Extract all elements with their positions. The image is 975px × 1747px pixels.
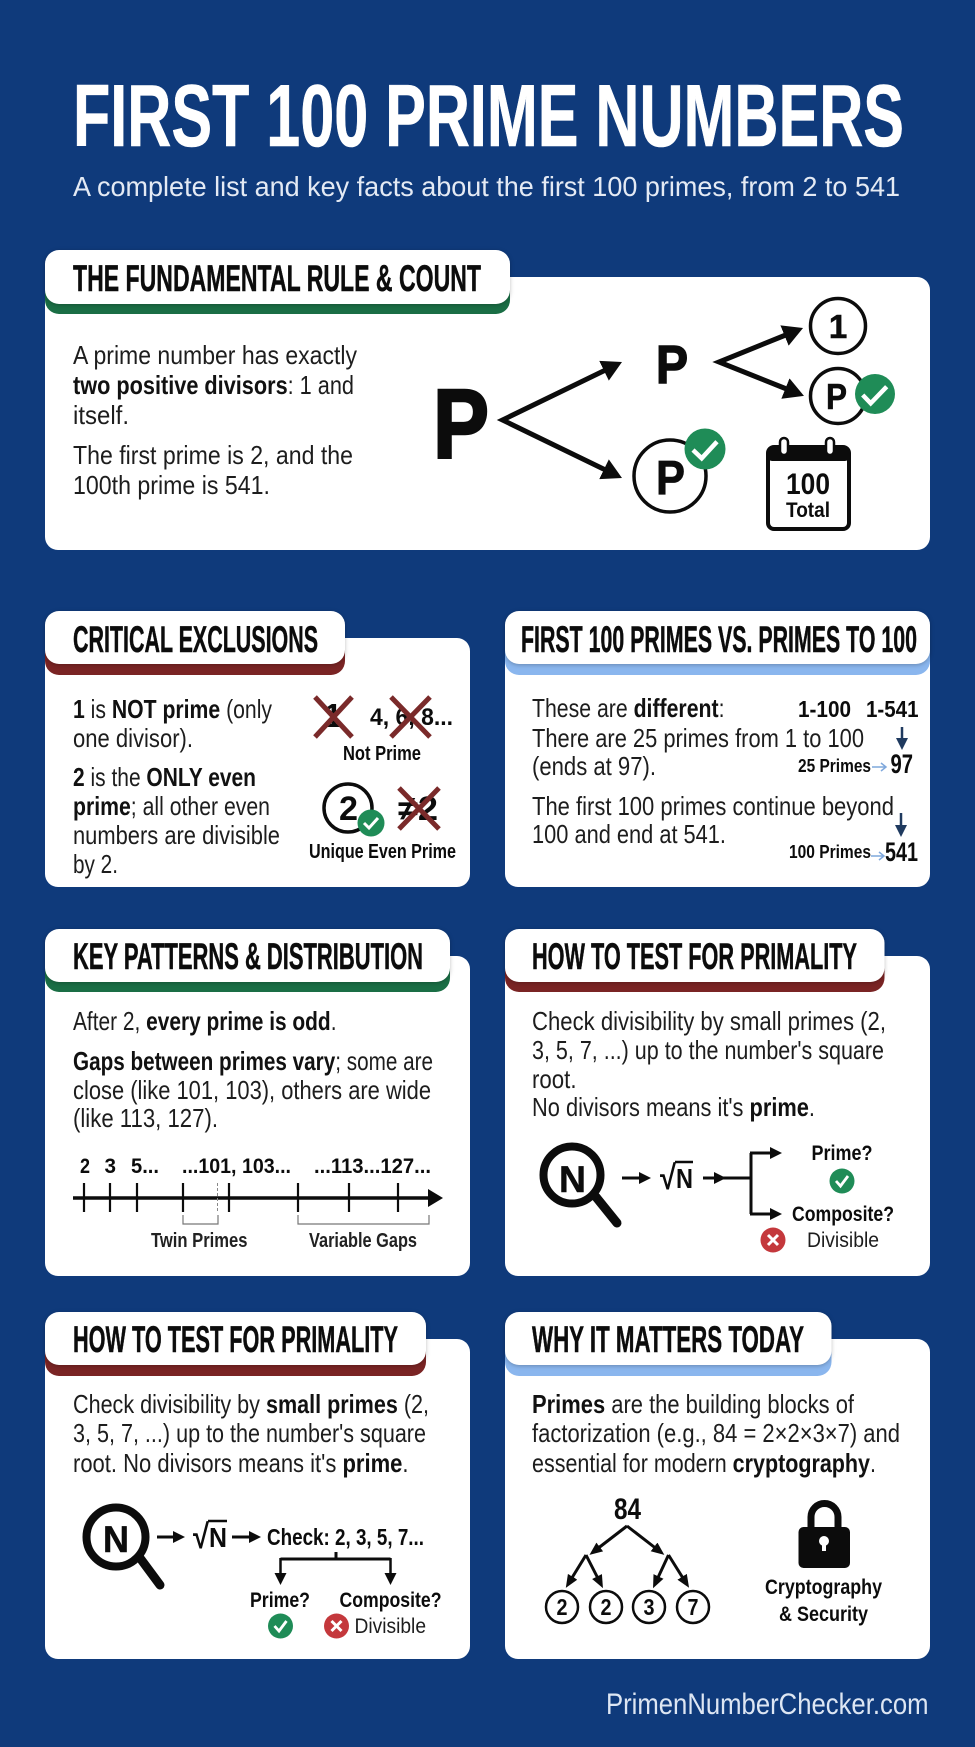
panel heading tab	[45, 1312, 426, 1376]
body text: prime; all other even	[73, 791, 270, 821]
number line chart: ...113...127...	[314, 1155, 431, 1178]
panel: how to test for primality (upper)	[505, 929, 930, 1276]
comparison diagram: 1-541	[866, 696, 919, 722]
icon: not prime examples: Not Prime	[343, 743, 421, 765]
flow diagram: primality test: Composite?	[792, 1203, 894, 1226]
flow diagram: primality test: Prime?	[812, 1142, 872, 1165]
panel heading tab	[45, 611, 345, 675]
number line chart	[73, 1155, 443, 1252]
flow diagram: primality test: √	[660, 1159, 676, 1197]
body text: Gaps between primes vary; some are	[73, 1046, 433, 1076]
panel heading tab	[505, 611, 930, 675]
cryptography label: & Security	[779, 1603, 868, 1626]
panel: critical exclusions	[45, 611, 470, 887]
body text: 3, 5, 7, ...) up to the number's square	[73, 1418, 426, 1448]
comparison diagram: 541	[885, 837, 918, 867]
panel: the fundamental rule and count	[45, 250, 930, 550]
body text: (like 113, 127).	[73, 1103, 218, 1133]
body text: The first 100 primes continue beyond	[532, 791, 894, 821]
factor tree of 84: 84	[614, 1493, 641, 1526]
flow diagram: check small primes: Composite?	[340, 1589, 442, 1612]
flow diagram: primality test: Divisible	[807, 1229, 879, 1252]
icon: not prime examples: 4, 6, 8...	[370, 704, 453, 731]
body text: 100 and end at 541.	[532, 819, 726, 849]
panel heading tab	[505, 929, 884, 992]
flow diagram: check small primes: N	[103, 1519, 129, 1560]
icon: unique even prime	[309, 784, 456, 863]
icon: calendar 100 total: Total	[786, 499, 830, 522]
flow diagram: check small primes: N	[209, 1522, 227, 1553]
number line chart: ...101, 103...	[182, 1155, 291, 1178]
comparison diagram	[789, 696, 919, 867]
flow diagram: primality test	[544, 1142, 894, 1252]
body text: 100th prime is 541.	[73, 470, 270, 500]
body text: (ends at 97).	[532, 751, 656, 781]
body text: The first prime is 2, and the	[73, 440, 353, 470]
diagram: prime divisor tree: P	[656, 335, 688, 395]
body text: essential for modern cryptography.	[532, 1448, 876, 1478]
diagram: prime divisor tree: P	[433, 369, 489, 479]
factor tree of 84: 3	[644, 1594, 654, 1620]
panel heading tab	[45, 929, 450, 992]
flow diagram: check small primes: √	[193, 1518, 209, 1556]
icon: not prime examples	[315, 697, 453, 765]
panel: why it matters today	[505, 1312, 930, 1659]
diagram: prime divisor tree: P	[826, 376, 847, 417]
diagram: prime divisor tree: 1	[829, 308, 847, 345]
body text: root.	[532, 1064, 576, 1094]
flow diagram: check small primes: Prime?	[250, 1589, 310, 1612]
icon: unique even prime: Unique Even Prime	[309, 841, 456, 863]
number line chart: 3	[104, 1155, 116, 1178]
body text: 2 is the ONLY even	[73, 762, 256, 792]
number line chart: Variable Gaps	[309, 1230, 417, 1252]
body text: Check divisibility by small primes (2,	[532, 1006, 886, 1036]
body text: Primes are the building blocks of	[532, 1389, 855, 1419]
comparison diagram: 97	[890, 749, 913, 779]
body text: two positive divisors: 1 and	[73, 370, 354, 400]
number line chart: 2	[80, 1155, 90, 1178]
body text: 1 is NOT prime (only	[73, 694, 272, 724]
flow diagram: check small primes: Divisible	[354, 1615, 426, 1638]
body text	[532, 1006, 886, 1122]
body text: root. No divisors means it's prime.	[73, 1448, 408, 1478]
body text: A prime number has exactly	[73, 340, 357, 370]
factor tree of 84	[546, 1493, 709, 1623]
icon: unique even prime: 2	[339, 790, 358, 828]
subtitle: A complete list and key facts about the first 100 primes, from 2 to 541	[73, 171, 900, 202]
icon: unique even prime: ≠2	[398, 790, 438, 828]
diagram: prime divisor tree	[433, 298, 895, 512]
icon: not prime examples: 1	[324, 697, 342, 734]
footer website: PrimenNumberChecker.com	[606, 1688, 928, 1721]
diagram: prime divisor tree: P	[656, 452, 685, 505]
body text: itself.	[73, 400, 129, 430]
body text	[73, 694, 280, 879]
panel heading tab: WHY IT MATTERS TODAY	[532, 1319, 804, 1360]
body text: close (like 101, 103), others are wide	[73, 1075, 431, 1105]
panel heading tab: CRITICAL EXCLUSIONS	[73, 619, 318, 660]
panel: first 100 primes vs primes to 100	[505, 611, 930, 887]
body text	[532, 1389, 900, 1478]
panel heading tab	[45, 250, 510, 314]
body text: There are 25 primes from 1 to 100	[532, 723, 864, 753]
flow diagram: check small primes: Check: 2, 3, 5, 7...	[267, 1524, 424, 1550]
panel heading tab: THE FUNDAMENTAL RULE & COUNT	[73, 258, 481, 299]
body text: factorization (e.g., 84 = 2×2×3×7) and	[532, 1418, 900, 1448]
factor tree of 84: 7	[688, 1594, 698, 1620]
comparison diagram: 100 Primes	[789, 842, 871, 862]
body text: numbers are divisible	[73, 820, 280, 850]
flow diagram: primality test: N	[559, 1159, 586, 1200]
number line chart: Twin Primes	[151, 1230, 248, 1252]
number line chart: 5...	[131, 1155, 159, 1178]
panel heading tab	[505, 1312, 832, 1376]
body text	[73, 340, 357, 500]
body text: 3, 5, 7, ...) up to the number's square	[532, 1035, 884, 1065]
factor tree of 84: 2	[556, 1594, 568, 1620]
icon: calendar 100 total	[767, 438, 850, 529]
body text: After 2, every prime is odd.	[73, 1006, 336, 1036]
panel: key patterns and distribution	[45, 929, 470, 1276]
body text: No divisors means it's prime.	[532, 1092, 815, 1122]
flow diagram: primality test: N	[676, 1163, 693, 1194]
flow diagram: check small primes	[86, 1508, 442, 1638]
panel heading tab: HOW TO TEST FOR PRIMALITY	[73, 1319, 398, 1360]
factor tree of 84: 2	[600, 1594, 612, 1620]
comparison diagram: 1-100	[798, 696, 851, 722]
body text: Check divisibility by small primes (2,	[73, 1389, 429, 1419]
icon: padlock	[798, 1504, 850, 1568]
body text	[73, 1389, 429, 1478]
panel: how to test for primality (lower)	[45, 1312, 470, 1659]
body text	[73, 1006, 433, 1133]
body text: These are different:	[532, 693, 724, 723]
comparison diagram: 25 Primes	[798, 756, 871, 776]
body text	[532, 693, 894, 849]
body text: by 2.	[73, 849, 118, 879]
cryptography label	[765, 1576, 882, 1626]
body text: one divisor).	[73, 723, 193, 753]
icon: calendar 100 total: 100	[786, 468, 830, 501]
panel heading tab: KEY PATTERNS & DISTRIBUTION	[73, 936, 423, 977]
cryptography label: Cryptography	[765, 1576, 882, 1599]
